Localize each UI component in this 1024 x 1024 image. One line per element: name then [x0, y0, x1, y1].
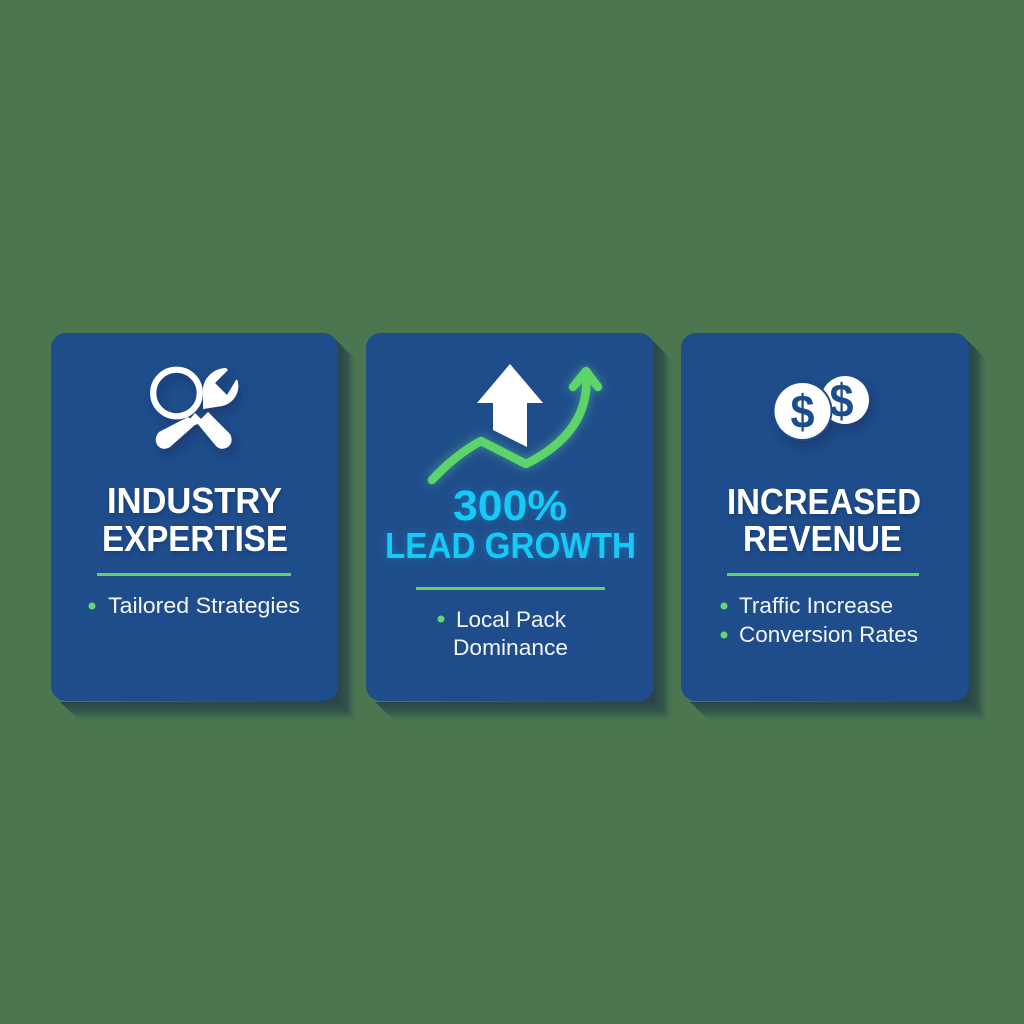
bullet list: increased revenue: Conversion Rates [739, 622, 918, 647]
card background: increased revenue [681, 333, 969, 701]
icon: green growth arrow [432, 371, 598, 480]
heading: 300% lead growth: LEAD GROWTH [385, 525, 636, 566]
divider: industry expertise [97, 573, 291, 576]
icon: dollar coins: $ [830, 374, 854, 427]
bullet list: lead growth [438, 607, 568, 660]
heading: industry expertise: INDUSTRY [107, 480, 282, 521]
icon: magnifier and wrench [153, 368, 238, 449]
card background: industry expertise [51, 333, 338, 701]
icon: white up arrow [477, 364, 543, 447]
heading: increased revenue: INCREASED [727, 481, 921, 522]
heading: increased revenue [727, 481, 921, 559]
card shadow: increased revenue [690, 340, 989, 723]
icon: dollar coins [772, 374, 869, 441]
panel: lead growth [366, 333, 674, 723]
divider: increased revenue [727, 573, 919, 576]
heading: industry expertise: EXPERTISE [102, 518, 288, 559]
bullet list: lead growth: Local Pack [456, 607, 567, 632]
heading: industry expertise [102, 480, 288, 559]
divider: lead growth [416, 587, 605, 590]
panel: industry expertise [51, 333, 358, 723]
bullet list: increased revenue [720, 593, 918, 647]
card shadow: lead growth [375, 340, 674, 723]
heading: 300% lead growth [385, 482, 636, 566]
card shadow: industry expertise [60, 340, 358, 723]
card background: lead growth [366, 333, 654, 701]
bullet list: industry expertise: Tailored Strategies [108, 593, 300, 618]
icon: dollar coins: $ [790, 385, 814, 438]
panel: increased revenue [681, 333, 989, 723]
bullet list: lead growth: Dominance [453, 635, 568, 660]
bullet list: increased revenue: Traffic Increase [739, 593, 893, 618]
heading: increased revenue: REVENUE [743, 518, 902, 559]
heading: 300% lead growth: 300% [453, 482, 567, 530]
